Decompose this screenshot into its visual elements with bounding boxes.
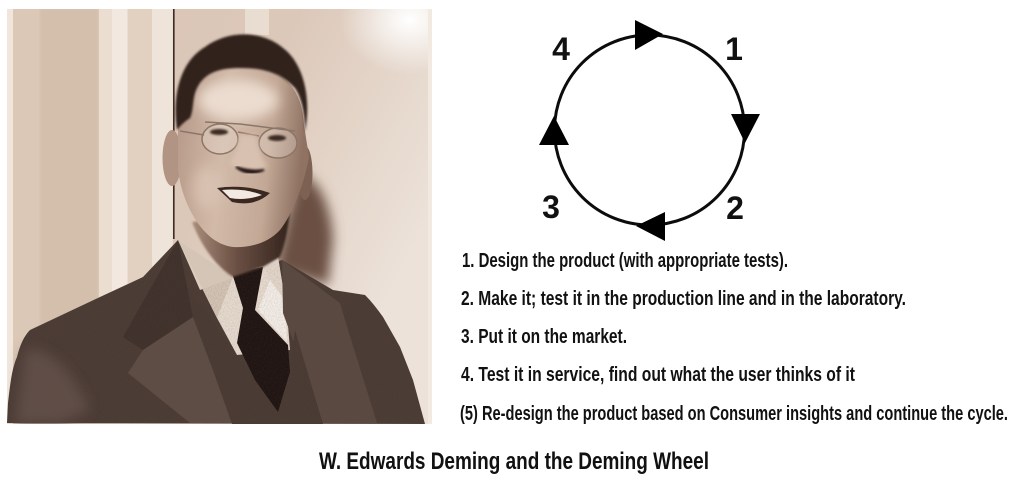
Deming wheel diagram [539,20,760,241]
ears [162,130,312,200]
cheek highlight [192,168,216,206]
arrow: left [539,116,569,145]
necktie [232,267,290,412]
caption: W. Edwards Deming and the Deming Wheel [319,448,709,475]
left lapel [123,240,232,423]
hair [176,34,307,132]
arrow: bottom [636,212,665,241]
photo background: wall and door trim [7,9,432,424]
coat [7,240,425,424]
coat sleeve highlights [15,350,90,424]
label: 1: 1 [725,31,743,67]
step 3: 3. Put it on the market. [461,326,627,348]
forehead highlight [198,80,278,120]
label: 3: 3 [542,189,560,225]
nose [229,135,267,172]
cycle circle [554,35,744,225]
arrow: top [635,20,663,50]
right lapel [282,260,377,423]
step 1: 1. Design the product (with appropriate tests). [462,250,788,272]
smile [217,187,270,203]
face [178,66,309,247]
step 4: 4. Test it in service, find out what the user thinks of it [461,364,855,386]
step 2: 2. Make it; test it in the production line and in the laboratory. [461,288,906,310]
steps list [460,250,1008,425]
eyeglasses [180,122,297,158]
photo: W. Edwards Deming portrait [7,9,432,424]
shirt collar [178,240,290,355]
nostril shadow [236,167,264,173]
arrow: right [731,114,760,143]
label: 2: 2 [726,190,744,226]
label: 4: 4 [552,31,570,67]
coat texture [202,262,290,404]
vest [218,331,323,424]
neck shadow [192,212,290,277]
eyes [210,129,286,141]
